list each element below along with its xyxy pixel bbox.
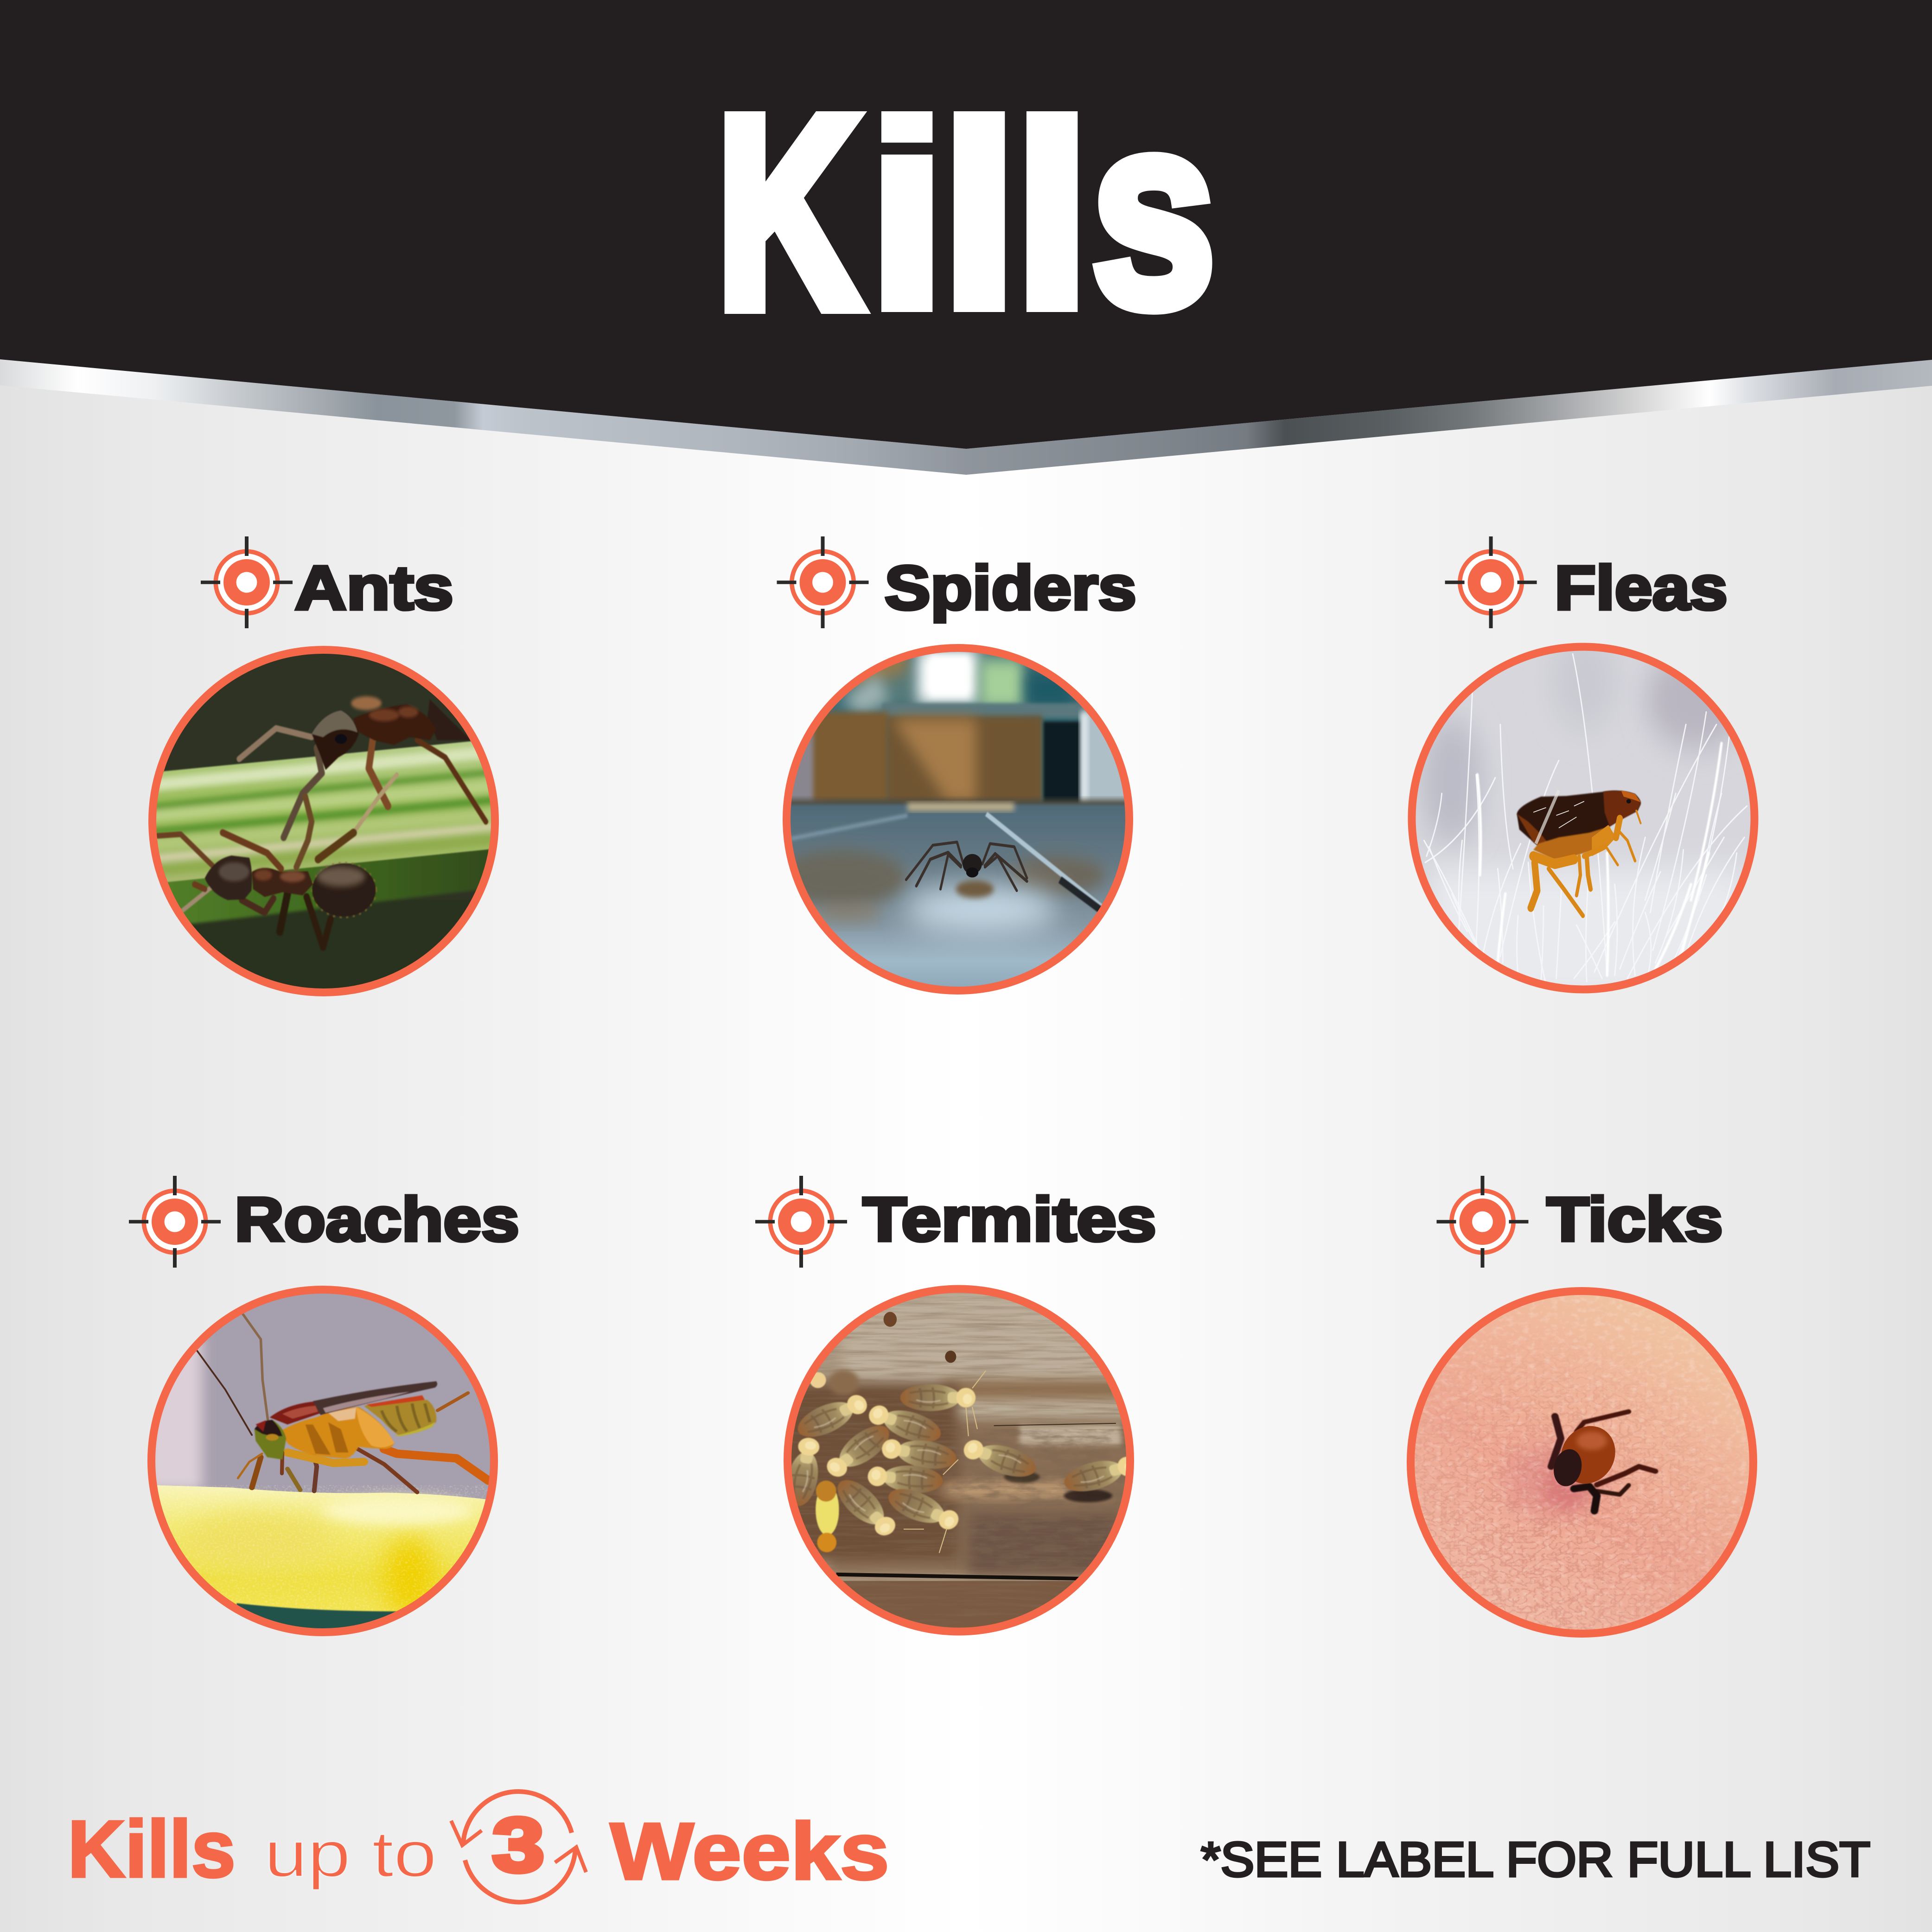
icon: target <box>1445 536 1537 628</box>
text: Weeks: Weeks <box>610 1806 889 1896</box>
icon: target <box>755 1176 847 1268</box>
label: Termites: Termites <box>863 1185 1156 1254</box>
text: up to: up to <box>264 1817 437 1890</box>
photo: tick on skin <box>1401 1284 1778 1639</box>
panel: fleas <box>1401 536 1778 1003</box>
flea <box>1517 791 1641 850</box>
label: Roaches: Roaches <box>235 1185 519 1254</box>
label: Ants: Ants <box>295 554 453 623</box>
title: l <box>942 60 1017 363</box>
lower ant body <box>312 863 376 917</box>
footer claim: kills up to 3 weeks <box>68 1792 889 1902</box>
body <box>255 1381 437 1460</box>
panel: ticks <box>1401 1176 1778 1639</box>
photo ring <box>151 1290 494 1632</box>
icon: target <box>1436 1176 1528 1268</box>
icon: target <box>129 1176 221 1268</box>
title: l <box>1014 60 1090 363</box>
photo ring <box>1410 1291 1753 1634</box>
legs <box>384 1449 488 1480</box>
antenna of lower ant <box>354 775 397 833</box>
icon: target <box>777 536 869 628</box>
photo: cockroach on a sponge <box>140 1284 516 1639</box>
tick <box>1551 1412 1655 1511</box>
icon: target <box>201 536 293 628</box>
photo ring <box>1412 647 1754 989</box>
title <box>724 111 1212 315</box>
panel: roaches <box>129 1176 519 1639</box>
text: Kills: Kills <box>68 1804 236 1894</box>
photo ring <box>786 648 1129 990</box>
photo: termites on wood <box>775 1284 1152 1635</box>
icon: 3 with circular arrows: 3 <box>492 1802 544 1887</box>
photo ring <box>152 650 495 992</box>
header banner <box>0 0 1932 475</box>
photo ring <box>787 1289 1130 1632</box>
title: K <box>718 60 860 363</box>
black header shape <box>0 0 1932 449</box>
label: Ticks: Ticks <box>1547 1185 1723 1254</box>
antennae <box>197 1314 488 1492</box>
label: Fleas: Fleas <box>1555 554 1728 623</box>
panel: termites <box>755 1176 1156 1635</box>
metallic chevron ribbon <box>0 359 1932 475</box>
panel: spiders <box>775 536 1149 1001</box>
icon: 3 with circular arrows <box>451 1792 586 1902</box>
title: i <box>869 60 945 363</box>
panel: ants <box>148 536 499 996</box>
top ant <box>158 696 486 947</box>
photo: flea in white fur <box>1401 631 1778 1003</box>
title: s <box>1091 60 1216 363</box>
photo: ants on a green stem <box>156 654 491 988</box>
footnote: *SEE LABEL FOR FULL LIST <box>1201 1832 1870 1887</box>
label: Spiders: Spiders <box>885 554 1136 623</box>
photo: spider on a kitchen floor <box>775 637 1149 1001</box>
